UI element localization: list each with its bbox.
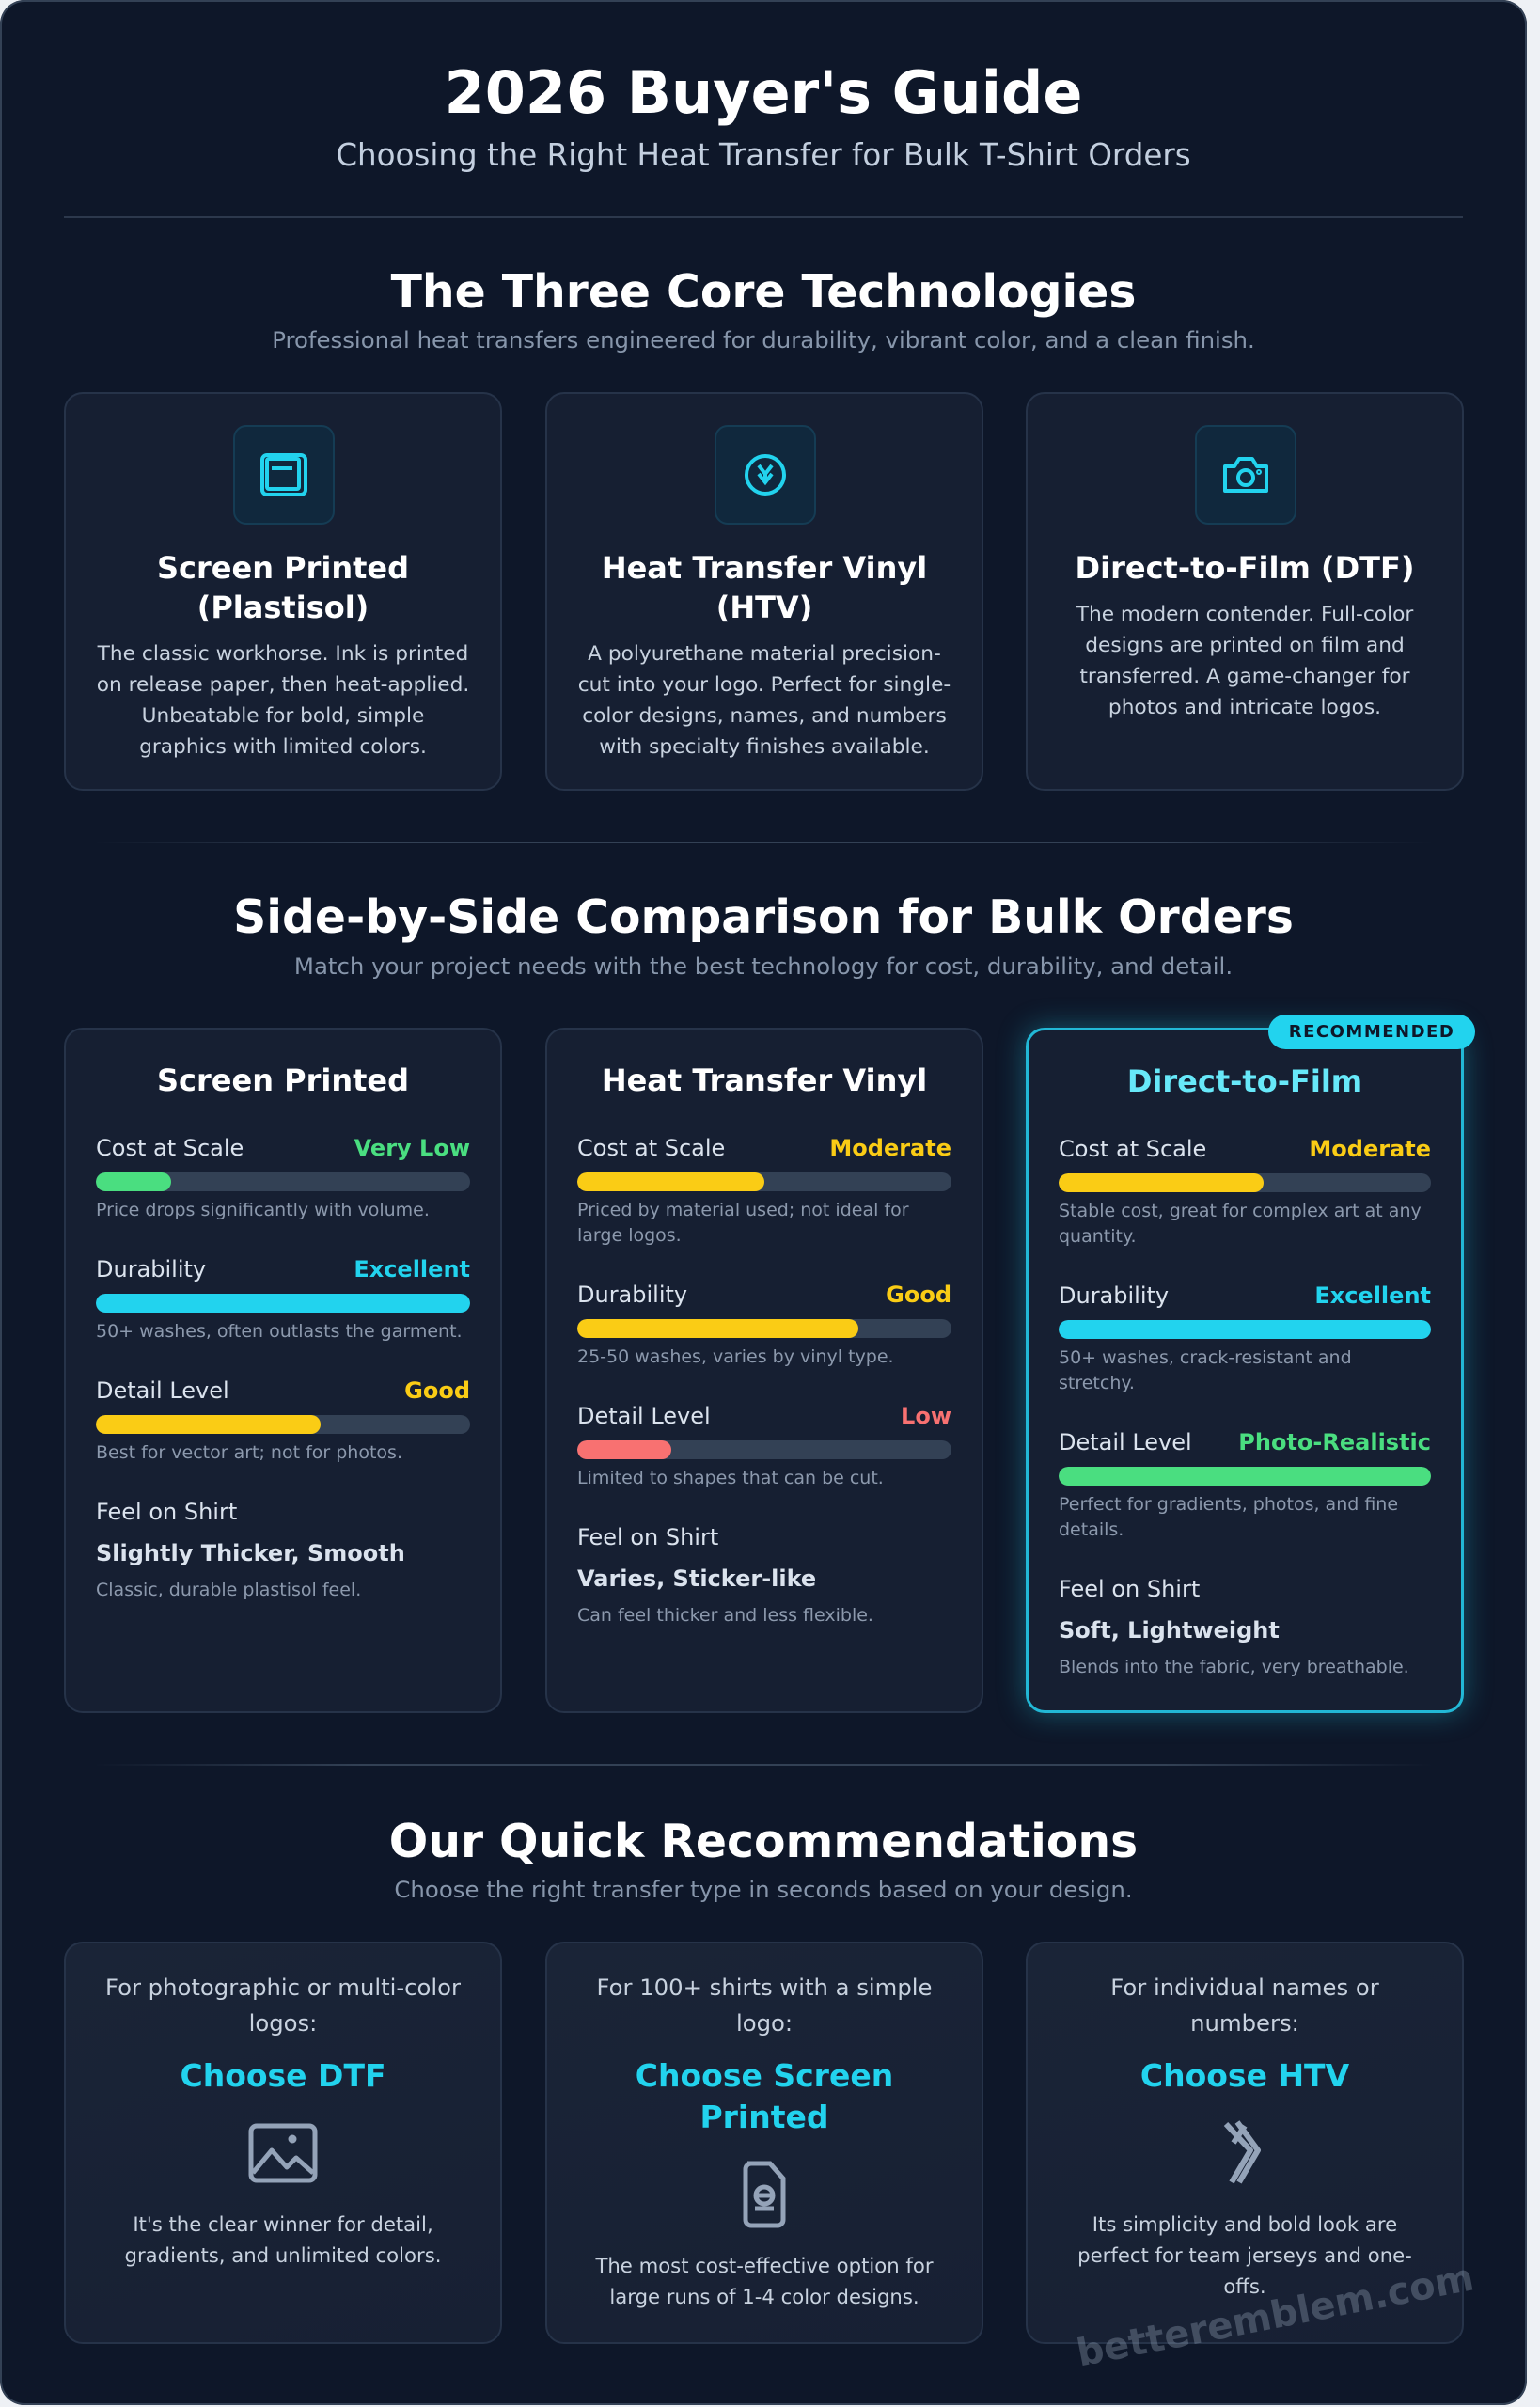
panel: choose DTF: For photographic or multi-color xyxy=(105,1974,461,2001)
panel: screen printed comparison: 50+ washes, often outlasts the garment. xyxy=(96,1320,463,1341)
panel: DTF comparison (recommended): Feel on Shirt xyxy=(1059,1576,1200,1602)
subtitle: Choosing the Right Heat Transfer for Bulk T-Shirt Orders xyxy=(336,137,1191,173)
panel: HTV comparison: Can feel thicker and less flexible. xyxy=(577,1604,873,1625)
panel: DTF comparison (recommended): Excellent xyxy=(1314,1282,1431,1309)
panel: DTF comparison (recommended): Perfect for gradients, photos, and fine xyxy=(1059,1493,1398,1514)
description: A polyurethane material precision- xyxy=(588,642,941,666)
panel: screen printed comparison: Excellent xyxy=(354,1256,470,1282)
panel: screen printed comparison: Cost at Scale xyxy=(96,1135,244,1161)
panel: DTF comparison (recommended): Cost at Scale xyxy=(1059,1136,1206,1162)
panel: HTV comparison: 25-50 washes, varies by vinyl type. xyxy=(577,1346,894,1367)
panel: screen printed comparison: Best for vector art; not for photos. xyxy=(96,1442,402,1463)
panel: choose HTV: For individual names or xyxy=(1110,1974,1379,2001)
description xyxy=(578,642,951,759)
panel: choose screen printed: large runs of 1-4 color designs. xyxy=(609,2285,919,2308)
description: The classic workhorse. Ink is printed xyxy=(98,642,468,666)
title: (HTV) xyxy=(716,590,812,625)
description: photos and intricate logos. xyxy=(1108,696,1381,719)
icon: chevrons xyxy=(1224,2120,1261,2183)
panel: HTV comparison: Priced by material used; not ideal for xyxy=(577,1200,909,1220)
description: on release paper, then heat-applied. xyxy=(97,673,469,697)
panel: choose DTF: gradients, and unlimited colors. xyxy=(124,2243,441,2267)
panel: choose HTV: offs. xyxy=(1223,2274,1266,2298)
description: cut into your logo. Perfect for single- xyxy=(578,673,951,697)
panel: choose DTF: It's the clear winner for detail, xyxy=(133,2212,433,2236)
panel: DTF comparison (recommended): Blends into the fabric, very breathable. xyxy=(1059,1657,1409,1677)
title xyxy=(157,550,409,625)
description xyxy=(1076,603,1414,719)
panel: choose screen printed: logo: xyxy=(736,2009,793,2037)
panel: DTF comparison (recommended): quantity. xyxy=(1059,1226,1137,1247)
description: transferred. A game-changer for xyxy=(1079,665,1410,688)
panel: DTF comparison (recommended): details. xyxy=(1059,1519,1124,1540)
panel: screen printed comparison: Screen Printed xyxy=(157,1062,409,1098)
title: Heat Transfer Vinyl xyxy=(602,550,927,586)
panel: HTV comparison: Limited to shapes that can be cut. xyxy=(577,1467,884,1487)
panel: choose HTV: Choose HTV xyxy=(1140,2057,1349,2094)
panel: HTV comparison: Detail Level xyxy=(577,1403,711,1429)
icon: vinyl xyxy=(715,425,816,525)
panel: choose screen printed: Printed xyxy=(699,2099,829,2135)
panel: HTV comparison: Heat Transfer Vinyl xyxy=(602,1062,927,1098)
description: The modern contender. Full-color xyxy=(1076,603,1413,626)
panel: HTV comparison: Durability xyxy=(577,1282,687,1308)
panel: DTF comparison (recommended): Soft, Lightweight xyxy=(1059,1617,1280,1644)
section subtitle: Professional heat transfers engineered for durability, vibrant color, and a clean finish. xyxy=(272,326,1255,354)
description xyxy=(97,642,469,759)
description: with specialty finishes available. xyxy=(599,735,930,759)
panel: DTF comparison (recommended) xyxy=(1026,1028,1464,1713)
panel: screen printed comparison: Feel on Shirt xyxy=(96,1499,237,1525)
panel: choose HTV: numbers: xyxy=(1190,2009,1299,2037)
title: (Plastisol) xyxy=(197,590,369,625)
panel: HTV comparison: Low xyxy=(901,1403,951,1429)
panel: choose HTV xyxy=(1026,1942,1464,2344)
panel: choose DTF: logos: xyxy=(249,2009,317,2037)
heading: comparison: Side-by-Side Comparison for Bulk Orders xyxy=(233,890,1294,944)
panel: HTV comparison: Good xyxy=(886,1282,951,1308)
panel: choose screen printed: For 100+ shirts with a simple xyxy=(597,1974,932,2001)
panel: choose DTF: Choose DTF xyxy=(180,2057,385,2094)
panel: DTF xyxy=(1026,392,1464,791)
panel: HTV comparison: large logos. xyxy=(577,1224,682,1245)
heading: quick recommendations: Our Quick Recommendations xyxy=(389,1815,1138,1868)
panel: screen printed comparison: Good xyxy=(404,1377,470,1404)
panel: choose screen printed: The most cost-effective option for xyxy=(595,2254,934,2277)
icon: document xyxy=(743,2161,786,2228)
panel: DTF comparison (recommended): Moderate xyxy=(1309,1136,1431,1162)
panel: HTV comparison: Cost at Scale xyxy=(577,1135,725,1161)
title: Direct-to-Film (DTF) xyxy=(1076,550,1414,586)
panel: DTF comparison (recommended): 50+ washes, crack-resistant and xyxy=(1059,1346,1352,1367)
panel: HTV comparison: Moderate xyxy=(829,1135,951,1161)
panel: screen printed xyxy=(64,392,502,791)
panel: DTF comparison (recommended): stretchy. xyxy=(1059,1373,1135,1393)
panel: choose screen printed: Choose Screen xyxy=(636,2057,893,2094)
recommendations subtitle: Choose the right transfer type in seconds based on your design. xyxy=(394,1876,1133,1903)
panel: HTV comparison: Varies, Sticker-like xyxy=(577,1565,816,1592)
description: graphics with limited colors. xyxy=(139,735,427,759)
watermark: betteremblem.com xyxy=(1074,2257,1477,2375)
panel: DTF comparison (recommended): Photo-Realistic xyxy=(1238,1429,1431,1455)
description: designs are printed on film and xyxy=(1085,634,1405,657)
panel: DTF comparison (recommended): Stable cost, great for complex art at any xyxy=(1059,1200,1422,1220)
description: color designs, names, and numbers xyxy=(582,704,947,728)
panel: HTV xyxy=(545,392,983,791)
panel: screen printed comparison: Very Low xyxy=(354,1135,470,1161)
icon: image xyxy=(248,2123,318,2183)
panel: DTF comparison (recommended): Durability xyxy=(1059,1282,1169,1309)
description: Unbeatable for bold, simple xyxy=(142,704,424,728)
icon: screen xyxy=(233,425,335,525)
panel: DTF comparison (recommended): Direct-to-Film xyxy=(1127,1063,1362,1099)
panel: DTF comparison (recommended): Detail Level xyxy=(1059,1429,1192,1455)
panel: choose screen printed xyxy=(545,1942,983,2344)
title xyxy=(602,550,927,625)
badge: recommended: RECOMMENDED xyxy=(1289,1022,1454,1042)
panel: HTV comparison: Feel on Shirt xyxy=(577,1524,718,1550)
panel: screen printed comparison: Durability xyxy=(96,1256,206,1282)
panel: choose HTV: Its simplicity and bold look are xyxy=(1092,2212,1397,2236)
comparison subtitle: Match your project needs with the best technology for cost, durability, and detail. xyxy=(294,952,1233,980)
panel: HTV comparison xyxy=(545,1028,983,1713)
icon: camera xyxy=(1195,425,1296,525)
title: 2026 Buyer's Guide xyxy=(445,58,1082,127)
heading: three core technologies: The Three Core Technologies xyxy=(391,265,1136,319)
panel: choose HTV: perfect for team jerseys and one- xyxy=(1077,2243,1412,2267)
badge: recommended xyxy=(1268,1015,1475,1049)
panel: screen printed comparison: Classic, durable plastisol feel. xyxy=(96,1580,361,1600)
panel: screen printed comparison xyxy=(64,1028,502,1713)
title: Screen Printed xyxy=(157,550,409,586)
panel: screen printed comparison: Slightly Thicker, Smooth xyxy=(96,1540,405,1566)
panel: screen printed comparison: Price drops significantly with volume. xyxy=(96,1200,430,1220)
panel: choose DTF xyxy=(64,1942,502,2344)
panel: screen printed comparison: Detail Level xyxy=(96,1377,229,1404)
